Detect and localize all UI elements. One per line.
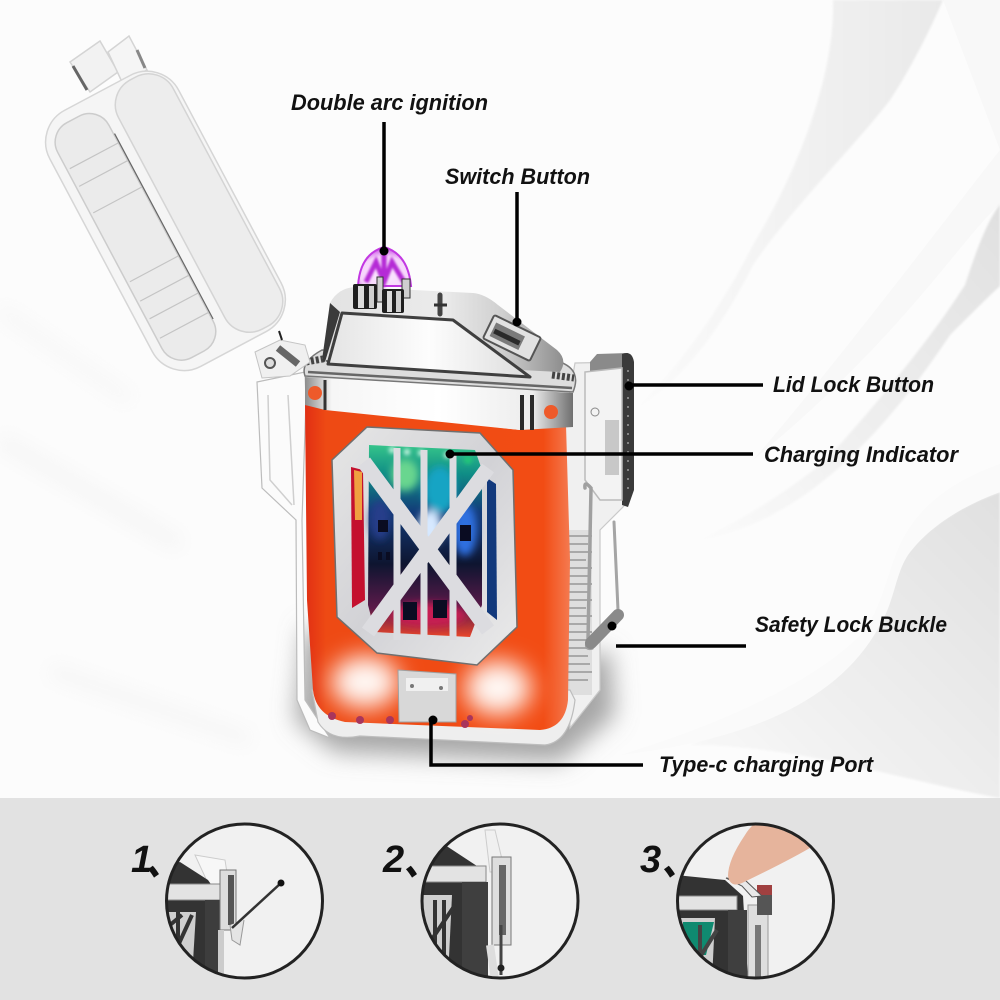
device shadow [295, 625, 615, 762]
closed safety pin [500, 925, 502, 975]
lower chrome band [305, 377, 573, 430]
right light strip [487, 478, 497, 620]
label: double arc ignition: Double arc ignition [291, 90, 488, 115]
label: lid lock button: Lid Lock Button [773, 372, 934, 397]
label: safety lock buckle: Safety Lock Buckle [755, 612, 947, 637]
glow patches [370, 459, 477, 627]
label: switch button: Switch Button [445, 164, 590, 189]
label: switch button [445, 164, 590, 326]
step 1 number: 1 [131, 839, 152, 881]
step 1 circular photo [160, 824, 322, 980]
hinge [255, 331, 310, 378]
bottom clear edge [312, 690, 575, 745]
step 3 [640, 815, 834, 980]
arc glow [358, 247, 411, 286]
octagonal chrome frame [332, 427, 517, 665]
label: charging indicator [446, 442, 959, 467]
screw: left [308, 386, 322, 400]
lid lock clip [585, 353, 634, 507]
background: white wave pattern [0, 0, 1000, 800]
step 3 number: 、 [661, 842, 699, 884]
chips [378, 520, 471, 620]
white glows at base [331, 656, 531, 715]
label: type-c charging port: Type-c charging Port [659, 752, 875, 777]
center pin [438, 295, 442, 314]
left clear side [257, 372, 330, 738]
label: lid lock button [624, 372, 934, 397]
left light strip [351, 467, 365, 608]
unlocked safety pin [232, 883, 281, 928]
step 2 number: 2 [382, 839, 404, 881]
label: charging indicator: Charging Indicator [764, 442, 959, 467]
inner display [368, 445, 482, 637]
transparent case body [257, 362, 625, 745]
upper chrome plate [322, 287, 563, 372]
label: type-c charging port [428, 716, 875, 777]
step 2 [382, 824, 578, 982]
step 1 number: 、 [145, 842, 183, 884]
electrode posts [353, 277, 410, 313]
step 3 number: 3 [640, 839, 661, 881]
base contacts [328, 712, 473, 728]
open transparent lid [33, 36, 298, 383]
lid shell [33, 59, 298, 383]
switch button [483, 315, 541, 361]
orange body [305, 405, 570, 730]
label: double arc ignition [291, 90, 488, 256]
LED dots [389, 447, 472, 464]
lid tabs [70, 36, 147, 92]
electrodes with purple arc [353, 247, 411, 313]
finger pressing lid [728, 826, 810, 884]
label: safety lock buckle [608, 612, 947, 646]
shoulder ring [304, 350, 576, 392]
right clear side [565, 362, 625, 728]
step 3 circular photo [675, 815, 834, 980]
safety lock buckle [585, 484, 618, 648]
step 2 circular photo [420, 824, 578, 982]
screw: right [544, 405, 558, 419]
USB type-c port [398, 670, 456, 722]
step 2 number: 、 [403, 842, 441, 884]
charging window [332, 427, 517, 665]
bottom grey band [0, 798, 1000, 1000]
step 1 [131, 824, 322, 980]
chrome bars [364, 448, 488, 640]
chrome top cap [304, 287, 576, 430]
